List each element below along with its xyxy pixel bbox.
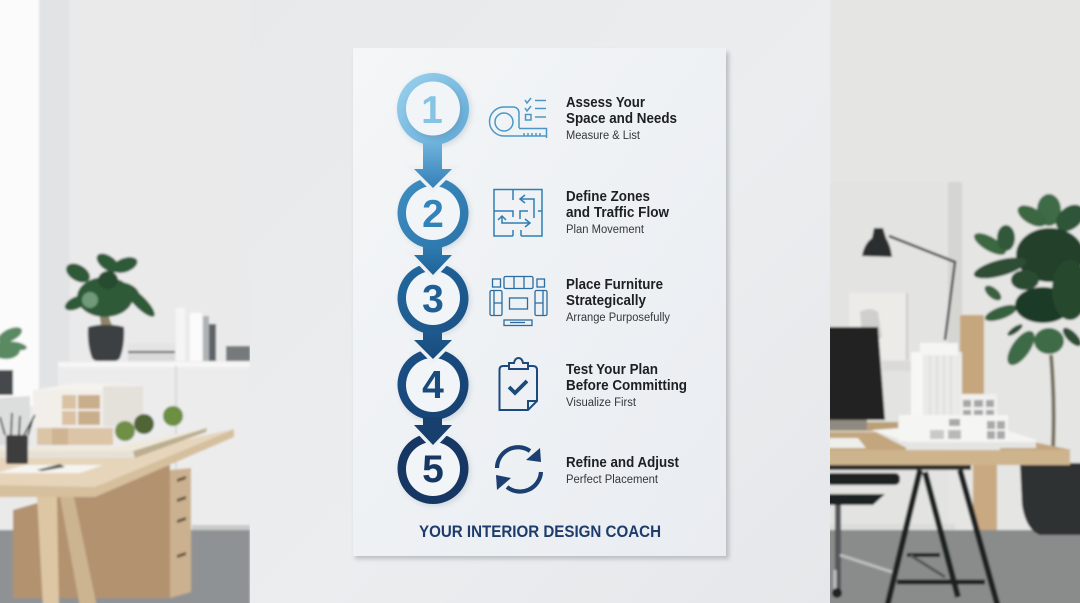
paper (0, 464, 103, 473)
text: step 4: Test Your Plan (566, 362, 658, 378)
poster shadow (355, 52, 729, 559)
icon: clipboard with check (500, 358, 537, 410)
icon: floor plan with traffic arrows (494, 190, 542, 236)
text: step 1: Space and Needs (566, 111, 677, 127)
window (0, 0, 39, 406)
desk lamp (862, 228, 955, 340)
wooden desk (826, 420, 1072, 470)
step 3 badge (398, 263, 470, 335)
text: step 1: Measure & List (566, 130, 641, 142)
step 2 badge (398, 178, 470, 250)
fiddle leaf plant (971, 194, 1080, 535)
step 5 badge: 5 (422, 448, 444, 491)
pen cup (0, 413, 35, 464)
text: step 4 (566, 362, 687, 409)
text: step 2 (566, 189, 670, 236)
floor (0, 530, 250, 603)
text: step 3: Arrange Purposefully (566, 312, 670, 324)
framed picture (849, 293, 908, 360)
left office scene (0, 0, 250, 603)
books and boxes on cabinet (128, 343, 175, 351)
text: step 1 (566, 95, 677, 142)
arrow 3 to 4 (414, 331, 452, 359)
step 5 badge (398, 433, 470, 506)
text: step 4: Visualize First (566, 397, 637, 409)
text: step 4: Before Committing (566, 378, 687, 394)
footer title: YOUR INTERIOR DESIGN COACH (419, 523, 661, 541)
icon: furniture layout (490, 276, 547, 326)
icon: refresh arrows (496, 447, 541, 492)
step 4 badge: 4 (422, 364, 444, 407)
grey ledge (0, 396, 30, 445)
wood desk (0, 429, 233, 487)
black office chair (826, 327, 900, 598)
text: step 3 (566, 277, 670, 324)
white building model (872, 343, 1036, 448)
right office scene (826, 0, 1080, 603)
step 2 badge: 2 (422, 193, 444, 236)
step 1 badge (397, 73, 471, 147)
step 3 badge: 3 (422, 278, 444, 321)
kraft paper tube (960, 315, 984, 405)
black trestle legs (887, 470, 998, 603)
text: step 3: Strategically (566, 293, 646, 309)
small plant by window (0, 324, 28, 395)
potted plant on cabinet (63, 250, 158, 361)
text: step 5 (566, 455, 679, 486)
text: step 1: Assess Your (566, 95, 645, 111)
step 1 badge: 1 (421, 89, 443, 132)
wood drawer unit (13, 465, 170, 598)
icon: tape measure and checklist (490, 98, 546, 138)
white cabinet (58, 362, 250, 525)
text: step 2: Define Zones (566, 189, 650, 205)
floor (826, 530, 1080, 603)
text: step 2: Plan Movement (566, 224, 645, 236)
central wall (250, 0, 830, 603)
text: step 2: and Traffic Flow (566, 205, 670, 221)
arrow 1 to 2 (414, 143, 452, 188)
arrow 4 to 5 (414, 417, 452, 445)
text: step 3: Place Furniture (566, 277, 663, 293)
text: step 5: Perfect Placement (566, 474, 659, 486)
architectural model (0, 428, 207, 451)
arrow 2 to 3 (414, 246, 452, 275)
text: step 5: Refine and Adjust (566, 455, 679, 471)
model trees (115, 406, 183, 441)
step 4 badge (398, 349, 470, 422)
panel: poster (353, 48, 726, 556)
